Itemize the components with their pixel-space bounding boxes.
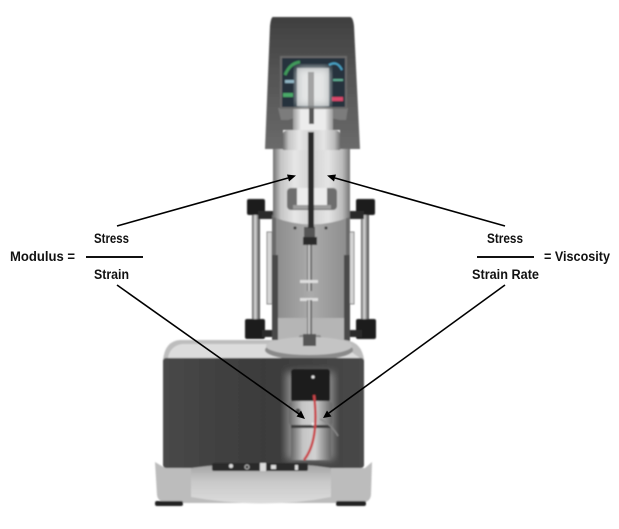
denominator: strain: Strain (94, 267, 129, 282)
left and right support rods (245, 199, 376, 339)
lower plate (265, 334, 353, 360)
denominator: strain rate: Strain Rate (472, 267, 539, 282)
modulus label: Modulus = (10, 249, 75, 264)
arrow: stress to upper column, right (327, 174, 505, 226)
arrow: strain rate to motor (323, 285, 505, 418)
viscosity label: = Viscosity (544, 249, 610, 264)
base silver foot (155, 462, 372, 506)
modulus formula (10, 231, 143, 282)
numerator: stress: Stress (487, 231, 523, 246)
arrow: stress to upper column, left (117, 174, 296, 226)
lower test chamber backplate (272, 215, 350, 343)
viscosity formula (472, 231, 610, 282)
motor cutaway (286, 369, 338, 460)
fraction bar (477, 256, 534, 258)
arrow: strain to motor (117, 285, 305, 419)
central black slot (308, 72, 314, 228)
fraction bar (86, 256, 143, 258)
upper column (273, 148, 350, 230)
touch screen (280, 56, 347, 109)
instrument photo (155, 17, 376, 506)
base dark housing (163, 358, 364, 468)
numerator: stress: Stress (94, 231, 129, 246)
instrument head (265, 17, 360, 150)
base top cover (163, 340, 364, 360)
control button strip (212, 463, 308, 471)
test geometry shaft and plates (299, 227, 321, 349)
